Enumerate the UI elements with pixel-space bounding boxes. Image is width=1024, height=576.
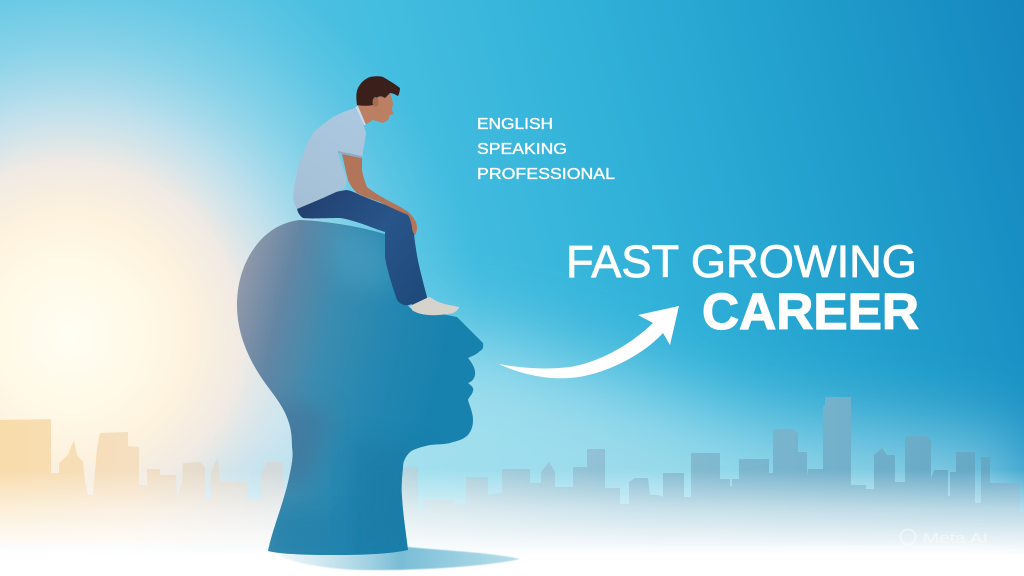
- far leg: [395, 225, 427, 305]
- shirt: [293, 108, 366, 209]
- head silhouette: [237, 220, 483, 556]
- jeans: [297, 190, 427, 305]
- subtitle text: ENGLISH: [477, 116, 553, 133]
- man sitting on head: [293, 76, 459, 315]
- hair: [356, 76, 400, 106]
- arrow: [499, 306, 679, 378]
- ground fade: [0, 470, 1024, 555]
- city skyline: left: [0, 419, 292, 545]
- shoe: [410, 297, 459, 315]
- arm: [342, 154, 417, 235]
- watermark: [900, 530, 988, 547]
- headline: CAREER: [702, 283, 919, 340]
- collar: [355, 106, 366, 125]
- headline: FAST GROWING: [566, 236, 917, 287]
- shirt sleeve shading: [338, 151, 362, 158]
- head ground shadow: [277, 547, 520, 570]
- subtitle text: [477, 116, 615, 183]
- head shading: [268, 236, 413, 555]
- subtitle text: SPEAKING: [477, 141, 567, 158]
- neck and face: [355, 93, 394, 125]
- ear: [372, 97, 378, 107]
- subtitle text: PROFESSIONAL: [477, 166, 615, 183]
- city skyline: right: [400, 397, 1024, 545]
- watermark: Meta AI: [923, 530, 988, 547]
- headline: [566, 236, 919, 340]
